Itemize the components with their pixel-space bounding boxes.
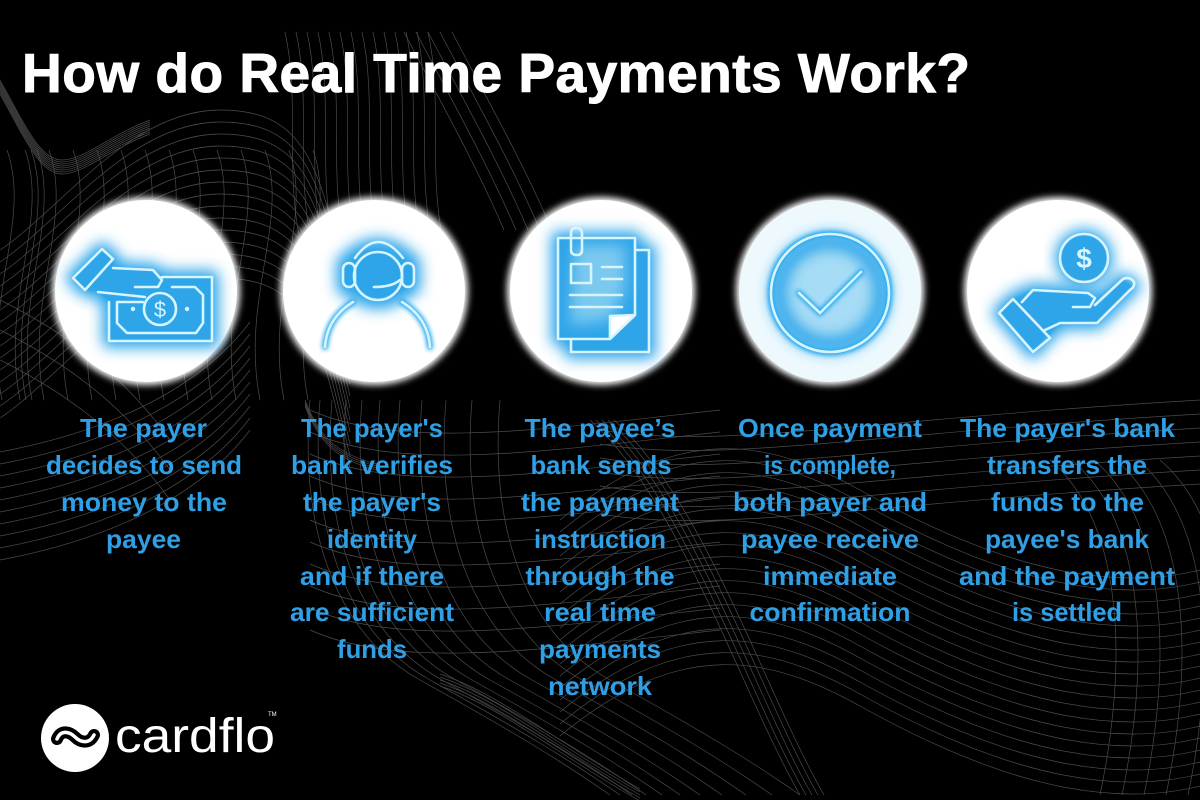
- caption: step 4: immediate: [763, 561, 897, 591]
- caption: step 2: identity: [327, 524, 418, 554]
- caption: step 1: The payer: [80, 413, 207, 443]
- caption: step 3: bank sends: [530, 450, 672, 480]
- caption: step 4: is complete,: [764, 450, 896, 480]
- caption: step 3: payments: [539, 634, 661, 664]
- icon: clipped documents: [558, 228, 649, 352]
- caption: step 3: [521, 413, 679, 701]
- caption: step 4: [733, 413, 927, 627]
- icon: hand and banknote: [73, 249, 212, 341]
- caption: step 1: money to the: [61, 487, 227, 517]
- caption: step 5: is settled: [1012, 597, 1122, 627]
- caption: step 3: instruction: [534, 524, 666, 554]
- logo: cardflo: TM: [268, 712, 277, 718]
- circle 2: bank agent with headset: [280, 197, 468, 385]
- caption: step 3: real time: [544, 597, 656, 627]
- icon: headset person: [325, 242, 430, 347]
- circle 3: documents: [507, 197, 695, 385]
- caption: step 5: The payer's bank: [960, 413, 1176, 443]
- circle 5: hand receiving coin: [964, 197, 1152, 385]
- caption: step 3: the payment: [521, 487, 679, 517]
- caption: step 2: bank verifies: [291, 450, 453, 480]
- caption: step 1: [46, 413, 242, 554]
- caption: step 5: payee's bank: [985, 524, 1150, 554]
- caption: step 1: payee: [106, 524, 181, 554]
- logo: cardflo: cardflo: [115, 710, 275, 763]
- caption: step 3: network: [548, 671, 653, 701]
- caption: step 1: decides to send: [46, 450, 242, 480]
- caption: step 5: funds to the: [991, 487, 1144, 517]
- icon: hand and banknote: $: [154, 297, 166, 322]
- caption: step 4: confirmation: [750, 597, 910, 627]
- caption: step 4: both payer and: [733, 487, 927, 517]
- caption: step 2: [290, 413, 454, 664]
- caption: step 2: the payer's: [303, 487, 441, 517]
- caption: step 4: Once payment: [738, 413, 922, 443]
- caption: step 2: The payer's: [301, 413, 443, 443]
- caption: step 5: [959, 413, 1176, 627]
- logo: cardflo: [41, 704, 277, 772]
- caption: step 2: are sufficient: [290, 597, 454, 627]
- caption: step 5: transfers the: [987, 450, 1147, 480]
- icon: open hand and dollar coin: [999, 234, 1134, 352]
- caption: step 5: and the payment: [959, 561, 1175, 591]
- icon: check mark in ring: [771, 234, 889, 352]
- circle 1: payer hands over money: [52, 197, 240, 385]
- caption: step 2: funds: [337, 634, 407, 664]
- circle 4: confirmation check: [736, 197, 924, 385]
- caption: step 2: and if there: [300, 561, 444, 591]
- caption: step 3: The payee’s: [524, 413, 676, 443]
- title: How do Real Time Payments Work?: [22, 42, 970, 104]
- caption: step 3: through the: [526, 561, 674, 591]
- caption: step 4: payee receive: [741, 524, 919, 554]
- icon: open hand and dollar coin: $: [1076, 243, 1092, 274]
